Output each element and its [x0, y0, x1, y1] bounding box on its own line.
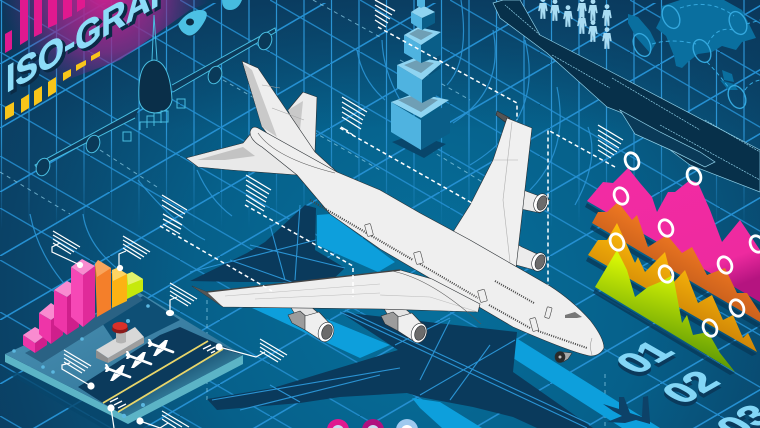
- number 02: 02: [652, 369, 730, 413]
- bar chart shadow: [25, 293, 143, 363]
- near engine 2: [381, 307, 429, 345]
- window row: [310, 200, 413, 260]
- tower shadow: [392, 134, 446, 158]
- bright shadow bands: [317, 214, 395, 272]
- location dots: [12, 304, 150, 418]
- far wing tip: [496, 111, 510, 122]
- near wing: [192, 270, 480, 312]
- number 01: 01: [606, 339, 684, 383]
- cockpit windows: [565, 312, 582, 318]
- data rings: [608, 151, 760, 338]
- nose cap line: [590, 338, 592, 355]
- block faces: [421, 103, 450, 150]
- platform side: [5, 354, 243, 424]
- platform top: [5, 293, 243, 416]
- bottom circular icons: [327, 419, 418, 428]
- area behind runway: [100, 296, 180, 350]
- doors: [365, 223, 552, 332]
- panel: title banner: [0, 0, 233, 120]
- right wing: [172, 28, 276, 92]
- orange series: [592, 202, 760, 322]
- pink series: [587, 168, 760, 302]
- fuselage: [250, 127, 604, 356]
- green series: [595, 250, 735, 372]
- yellow series: [588, 223, 757, 352]
- left wing: [35, 108, 139, 168]
- runway lines: [103, 341, 208, 403]
- lower runway strip: [118, 349, 243, 416]
- runway: [78, 327, 243, 412]
- fuselage front: [139, 60, 172, 113]
- landing gear: [123, 99, 185, 141]
- pink bar 1: [23, 327, 47, 353]
- green bar: [127, 272, 143, 299]
- callout leader lines: [52, 243, 265, 428]
- tail fin: [152, 15, 157, 60]
- pink stripes: [5, 0, 85, 53]
- far engine 2: [505, 240, 549, 273]
- continents: [628, 0, 756, 90]
- yellow dashes: [5, 51, 100, 120]
- front view blueprint plane: [34, 15, 276, 178]
- near tail stabilizer: [186, 128, 297, 175]
- nose gear: [555, 352, 572, 362]
- mountain chart: [585, 151, 760, 375]
- fuselage: [493, 0, 760, 192]
- magenta glow: [0, 0, 215, 90]
- faint dashes: [0, 0, 605, 428]
- main airplane: [186, 61, 604, 362]
- side view blueprint plane: [493, 0, 760, 192]
- route rings: [630, 3, 760, 111]
- near engine 1: [288, 306, 336, 344]
- small plane silhouette icon: [603, 396, 650, 424]
- airport platform: [5, 293, 243, 428]
- drop shadow: [585, 203, 760, 375]
- text placeholder stripes: [53, 0, 623, 428]
- stacked tower chart: [391, 0, 450, 158]
- route lines: [652, 4, 760, 90]
- bar chart: [23, 259, 143, 353]
- tail silhouette: [190, 205, 345, 282]
- far wing: [453, 118, 532, 268]
- lower wing and body silhouette: [207, 312, 593, 428]
- platform shadow: [5, 372, 170, 428]
- control building: [96, 322, 144, 363]
- orange bar: [95, 260, 111, 317]
- yellow bar: [112, 268, 127, 308]
- world map: [628, 0, 760, 111]
- icon: donut rings: [177, 0, 242, 38]
- pink bar 2: [39, 303, 63, 344]
- pink bar 4: [71, 259, 95, 327]
- icon group: people: [538, 0, 612, 49]
- dashed leader lines: [160, 27, 615, 297]
- shadow silhouette of the plane: [190, 205, 660, 428]
- landing gear box: [620, 110, 715, 167]
- engines: [34, 30, 274, 178]
- vertical tail fin: [242, 61, 337, 172]
- number 02: 02: [652, 365, 730, 409]
- cabin window strips: [505, 5, 760, 180]
- far engine 1: [478, 180, 551, 214]
- pink bar 3: [54, 281, 79, 335]
- small white planes: [105, 364, 130, 381]
- right tail stabilizer: [288, 92, 317, 152]
- number 01: 01: [606, 335, 684, 379]
